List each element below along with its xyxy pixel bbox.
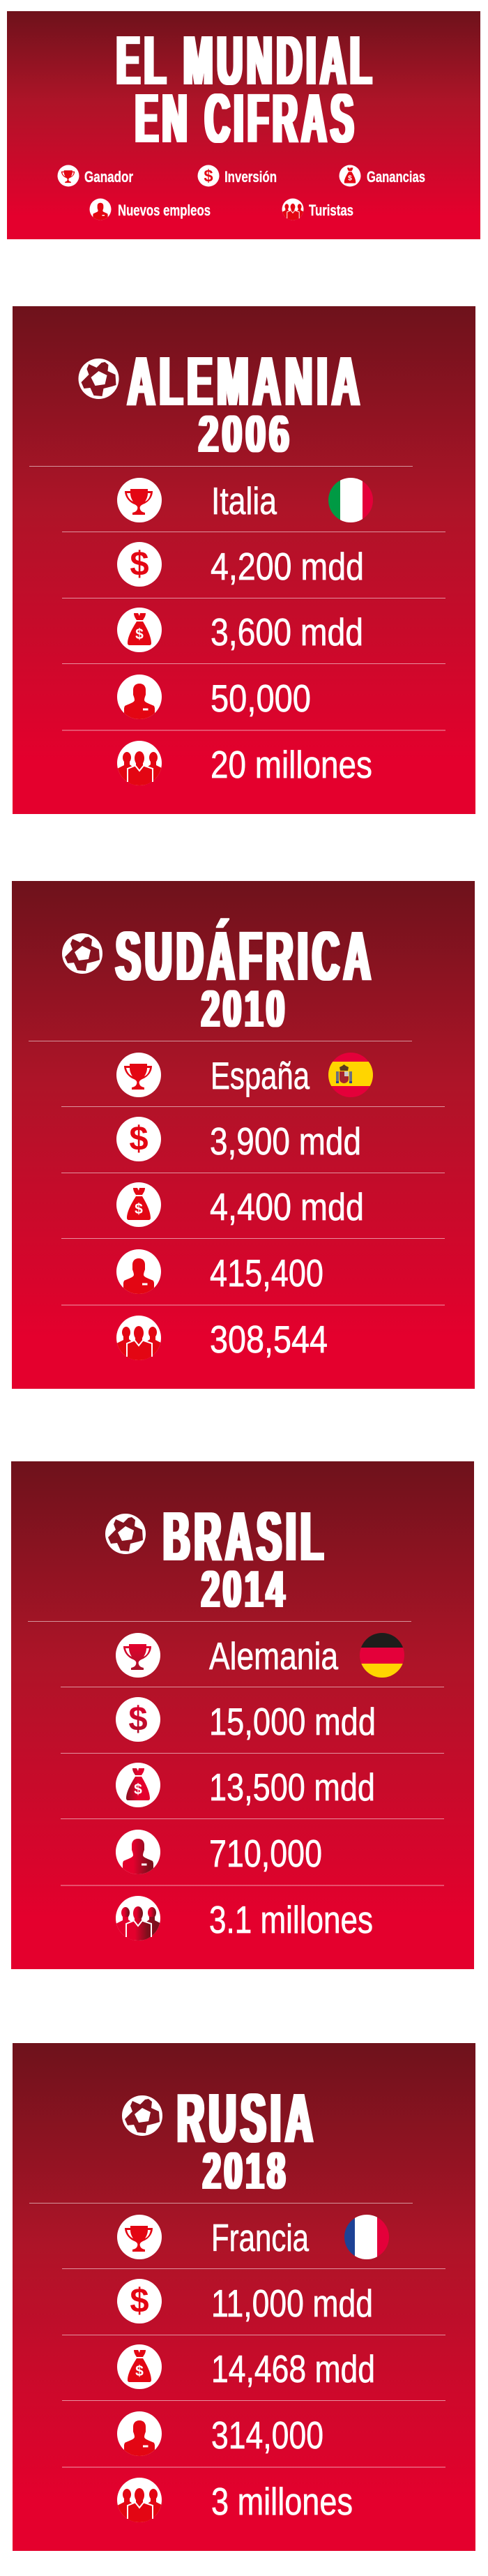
row: ganador: Francia (211, 2216, 309, 2259)
row: ganador: España (211, 1054, 310, 1097)
row: turistas (117, 2478, 353, 2523)
row: nuevos empleos (116, 1249, 323, 1295)
row: nuevos empleos (116, 1830, 322, 1875)
row: nuevos empleos: 50,000 (211, 677, 311, 720)
heading: Brasil: BRASIL (163, 1498, 328, 1576)
row: ganador (116, 1053, 310, 1097)
legend item: Nuevos empleos: Nuevos empleos (118, 202, 211, 219)
panel: Brasil 2014 (11, 1461, 474, 1969)
legend (58, 165, 425, 220)
legend item: Turistas (282, 199, 353, 220)
row: ganancias: 3,600 mdd (211, 610, 363, 654)
row: inversión (117, 542, 364, 588)
row: inversión: 15,000 mdd (209, 1700, 376, 1743)
row: ganancias (116, 1182, 364, 1228)
icon: football (78, 359, 119, 399)
legend item: Inversión (198, 165, 277, 186)
panel: header (7, 11, 480, 239)
row: nuevos empleos: 710,000 (209, 1832, 322, 1875)
row: turistas (117, 741, 372, 786)
row: inversión (117, 2279, 373, 2325)
panel: Alemania 2006 (13, 306, 475, 814)
row: inversión: 11,000 mdd (211, 2282, 373, 2325)
row: ganancias: 13,500 mdd (209, 1765, 375, 1809)
icon: football (122, 2095, 162, 2136)
row: ganancias: 14,468 mdd (211, 2347, 375, 2390)
row: inversión: 3,900 mdd (210, 1120, 361, 1163)
row: ganancias (116, 1763, 375, 1809)
row: turistas: 3.1 millones (209, 1898, 373, 1941)
legend item: Ganador (58, 165, 133, 186)
flag: Alemania (360, 1633, 404, 1678)
row: nuevos empleos (117, 2411, 323, 2457)
row: ganador: Italia (211, 479, 277, 522)
legend item: Turistas: Turistas (309, 202, 353, 219)
row: nuevos empleos: 415,400 (210, 1251, 323, 1295)
panel: Sudáfrica 2010 (12, 881, 475, 1389)
flag: Italia (328, 478, 373, 522)
year: 2018: 2018 (203, 2141, 289, 2200)
panel: Rusia 2018 (13, 2043, 475, 2551)
flag: Francia (344, 2215, 389, 2259)
legend item: Ganancias (340, 165, 425, 186)
icon: football (105, 1514, 146, 1554)
row: inversión (116, 1697, 376, 1743)
year: 2006: 2006 (199, 405, 293, 463)
legend item: Ganancias: Ganancias (367, 168, 425, 186)
row: ganador (116, 1633, 338, 1678)
row: ganador (117, 478, 277, 522)
row: ganancias (117, 608, 363, 654)
legend item: Nuevos empleos (90, 199, 211, 220)
legend item: Ganador: Ganador (84, 168, 133, 186)
year: 2014: 2014 (201, 1560, 288, 1618)
year: 2010: 2010 (201, 979, 288, 1038)
row: ganancias (117, 2344, 375, 2390)
row: ganador (117, 2215, 309, 2259)
title (116, 22, 376, 158)
row: ganador: Alemania (209, 1634, 338, 1678)
heading: Rusia: RUSIA (177, 2079, 317, 2157)
row: nuevos empleos: 314,000 (211, 2413, 323, 2457)
row: turistas: 20 millones (211, 743, 372, 786)
legend item: Inversión: Inversión (224, 168, 277, 186)
row: turistas: 308,544 (210, 1318, 328, 1361)
row: ganancias: 4,400 mdd (210, 1185, 364, 1228)
row: turistas: 3 millones (211, 2480, 353, 2523)
row: turistas (116, 1316, 328, 1361)
row: inversión: 4,200 mdd (211, 545, 364, 588)
row: inversión (116, 1117, 361, 1163)
row: turistas (116, 1896, 373, 1941)
icon: football (62, 933, 102, 974)
flag: España (328, 1053, 373, 1097)
row: nuevos empleos (117, 675, 311, 720)
